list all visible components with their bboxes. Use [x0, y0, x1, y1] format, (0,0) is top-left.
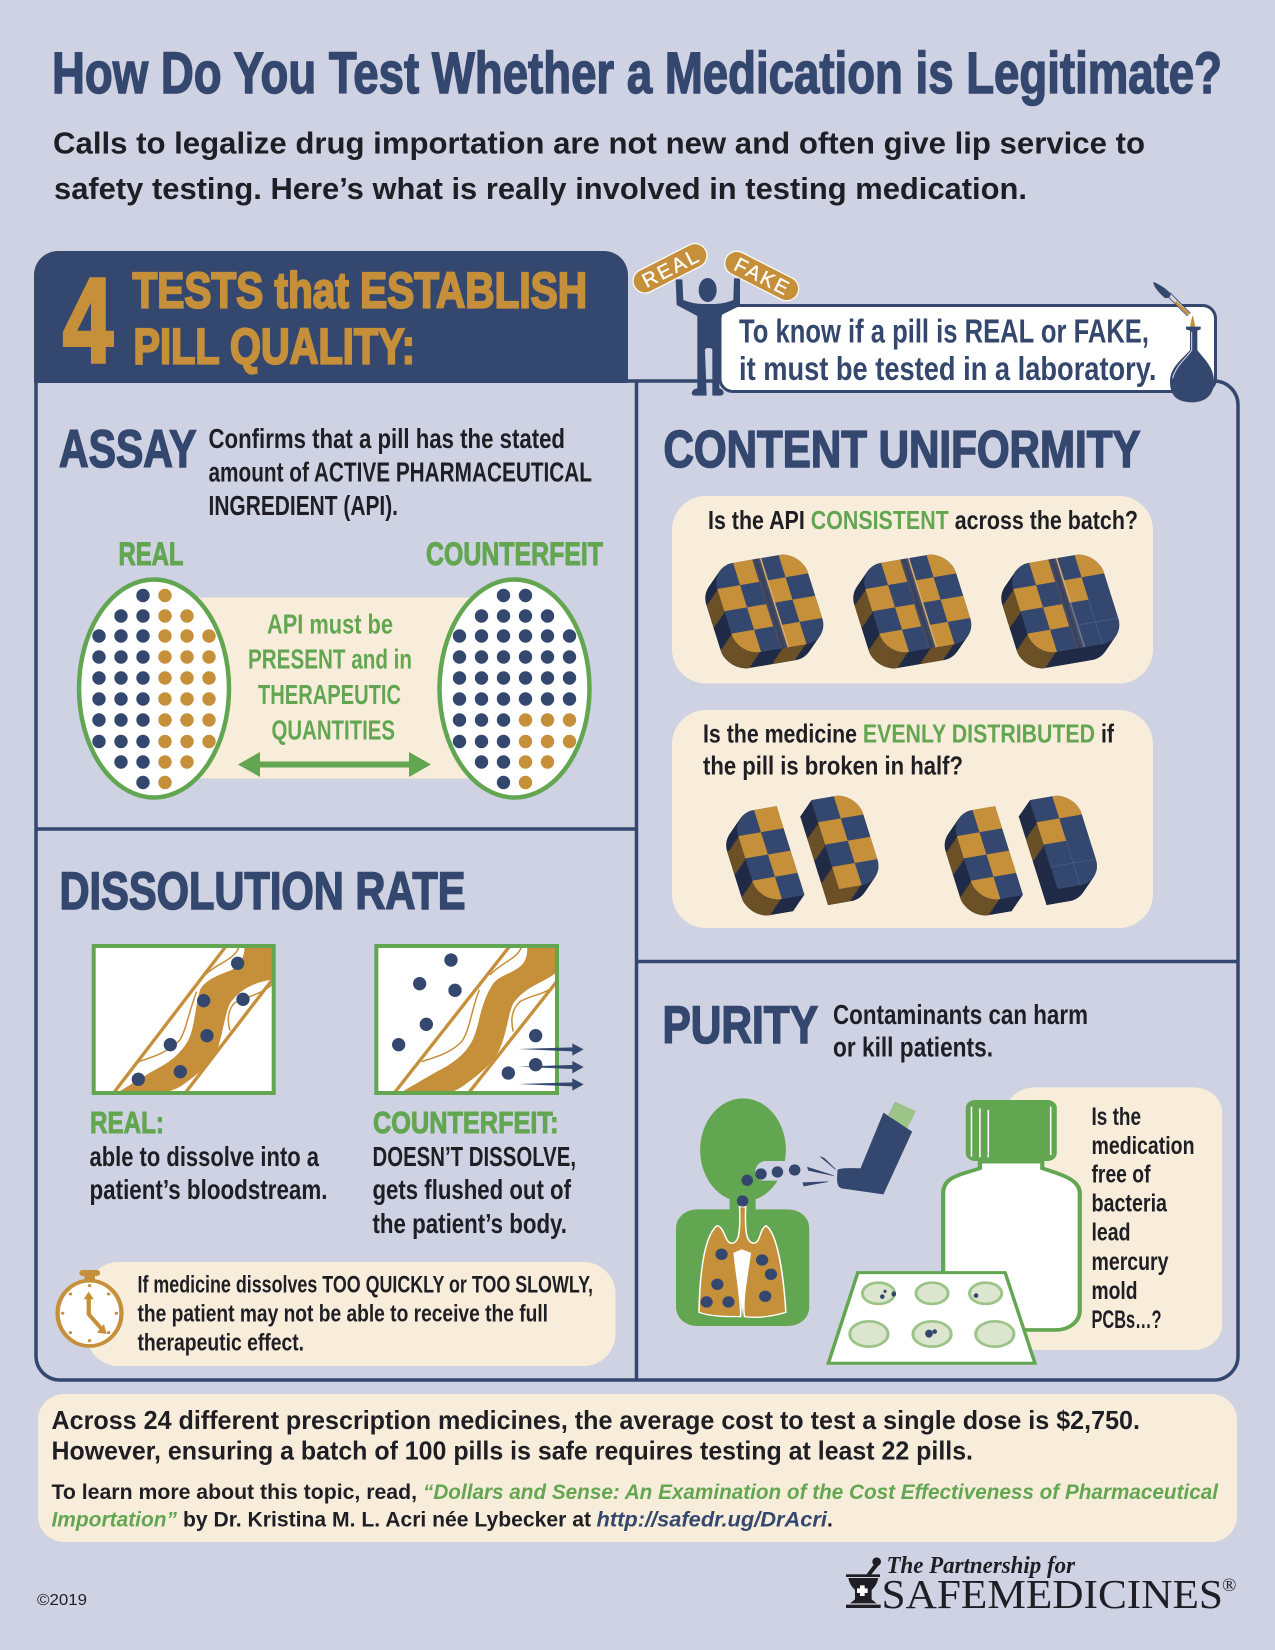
heading banner: 4 tests that establish pill quality: TESTS that ESTABLISH [132, 262, 587, 318]
heading: content uniformity: CONTENT UNIFORMITY [664, 421, 1140, 479]
text: real result: patient’s bloodstream. [90, 1174, 328, 1205]
text: purity description [833, 999, 1088, 1062]
panel: assay [59, 420, 603, 798]
heading banner: 4 tests that establish pill quality [34, 251, 628, 388]
callout: evenly distributed: Is the medicine EVENLY DISTRIBUTED if [703, 718, 1114, 748]
panel: cost summary: However, ensuring a batch of 100 pills is safe requires testing at least 22 pills. [52, 1436, 973, 1466]
panel: cost summary: Across 24 different prescription medicines, the average cost to test a single dose is $2,750. [52, 1405, 1140, 1435]
callout: consistent across batch: Is the API CONSISTENT across the batch? [708, 505, 1138, 535]
callout: tested in a laboratory: To know if a pill is REAL or FAKE, [739, 312, 1149, 350]
text: purity description: Contaminants can harm [833, 999, 1088, 1030]
heading: assay: ASSAY [59, 420, 196, 479]
band: API requirement: QUANTITIES [272, 714, 395, 746]
heading: dissolution rate: DISSOLUTION RATE [60, 862, 466, 921]
text: assay description: INGREDIENT (API). [208, 490, 398, 521]
text: real result: able to dissolve into a [90, 1141, 319, 1172]
logo: the partnership for safe medicines [846, 1553, 1236, 1617]
panel: cost summary [38, 1394, 1237, 1542]
copyright: ©2019 [37, 1592, 87, 1609]
text: real result [90, 1105, 328, 1205]
text: counterfeit result: the patient’s body. [372, 1208, 567, 1239]
icon: broken real pill [720, 792, 884, 919]
callout: evenly distributed: the pill is broken in half? [703, 750, 963, 780]
icon: inhaler [803, 1102, 916, 1194]
subtitle: safety testing. Here’s what is really involved in testing medication. [54, 171, 1027, 206]
callout: dissolve timing: the patient may not be able to receive the full [138, 1300, 548, 1328]
text: counterfeit result: DOESN’T DISSOLVE, [372, 1141, 576, 1172]
callout: free of contaminants: bacteria [1092, 1190, 1168, 1218]
heading: purity: PURITY [662, 996, 818, 1055]
icon: stopwatch [58, 1270, 121, 1346]
icon: broken counterfeit pill [939, 792, 1103, 919]
subtitle: Calls to legalize drug importation are not new and often give lip service to [53, 126, 1145, 160]
callout: tested in a laboratory [720, 306, 1216, 392]
icon: counterfeit pill [995, 551, 1125, 672]
text: learn more reference: Importation” [52, 1508, 177, 1532]
text: assay description: Confirms that a pill has the stated [208, 423, 565, 454]
panel: dissolution rate [58, 862, 616, 1366]
icon: medicine bottle [943, 1100, 1080, 1330]
text: learn more reference: “Dollars and Sense: An Examination of the Cost Effectiveness of Pharmaceutical [423, 1481, 1219, 1504]
icon: flask and dropper [1153, 282, 1214, 402]
logo: the partnership for safe medicines: The Partnership for [886, 1553, 1076, 1579]
callout: free of contaminants [1006, 1087, 1222, 1350]
callout: free of contaminants: mercury [1092, 1248, 1169, 1276]
callout: dissolve timing: If medicine dissolves TOO QUICKLY or TOO SLOWLY, [138, 1272, 593, 1298]
icon: real pill [699, 551, 829, 672]
callout: free of contaminants: lead [1092, 1218, 1130, 1246]
icon: petri dish tray [828, 1273, 1035, 1363]
logo: the partnership for safe medicines: SAFEMEDICINES [882, 1571, 1223, 1617]
band: API requirement: PRESENT and in [248, 644, 412, 674]
text: learn more reference: by Dr. Kristina M. L. Acri née Lybecker at [183, 1508, 591, 1532]
icon: person inhaling with lungs [676, 1098, 809, 1326]
chart: counterfeit pill dots [440, 580, 590, 798]
heading banner: 4 tests that establish pill quality: PILL QUALITY: [134, 318, 415, 374]
band: API requirement: THERAPEUTIC [258, 679, 401, 710]
label: counterfeit: COUNTERFEIT [426, 536, 603, 572]
text: learn more reference: http://safedr.ug/DrAcri [596, 1508, 828, 1532]
text: learn more reference [52, 1481, 1219, 1532]
text: assay description [208, 423, 592, 521]
callout: free of contaminants: free of [1092, 1160, 1151, 1188]
icon: person holding real and fake pills [629, 239, 803, 396]
diagram: counterfeit does not dissolve [376, 946, 584, 1093]
text: counterfeit result: COUNTERFEIT: [373, 1105, 558, 1140]
icon: person holding real and fake pills: REAL [639, 246, 702, 293]
callout: tested in a laboratory: it must be tested in a laboratory. [739, 350, 1156, 387]
arrow: double headed [238, 752, 431, 777]
callout: free of contaminants: Is the [1092, 1103, 1141, 1131]
subtitle [53, 126, 1145, 206]
callout: dissolve timing: therapeutic effect. [138, 1330, 304, 1356]
callout: consistent across batch [672, 496, 1153, 684]
icon: mortar and pestle [846, 1557, 881, 1608]
chart: real pill dots [79, 580, 229, 798]
callout: dissolve timing [86, 1262, 616, 1366]
callout: evenly distributed [672, 710, 1153, 928]
band: API requirement: API must be [267, 608, 393, 640]
text: real result: REAL: [90, 1105, 164, 1140]
icon: person holding real and fake pills: FAKE [730, 254, 792, 300]
band: API requirement [195, 598, 470, 778]
text: purity description: or kill patients. [833, 1032, 993, 1062]
text: assay description: amount of ACTIVE PHARMACEUTICAL [208, 456, 592, 488]
text: counterfeit result: gets flushed out of [372, 1174, 572, 1205]
text: counterfeit result [372, 1105, 576, 1239]
panel: content uniformity [664, 421, 1153, 928]
callout: free of contaminants: medication [1092, 1132, 1194, 1160]
icon: real pill [847, 551, 977, 672]
panel: purity [662, 996, 1222, 1363]
diagram: real dissolves [94, 946, 274, 1093]
heading banner: 4 tests that establish pill quality: 4 [63, 254, 113, 388]
panel frame: four tests grid [36, 381, 1238, 1380]
logo: the partnership for safe medicines: ® [1222, 1575, 1236, 1596]
label: real: REAL [118, 536, 184, 572]
text: learn more reference: . [827, 1508, 833, 1532]
callout: free of contaminants: PCBs…? [1092, 1306, 1162, 1334]
callout: free of contaminants: mold [1092, 1277, 1138, 1305]
text: learn more reference: To learn more about this topic, read, [52, 1481, 417, 1504]
